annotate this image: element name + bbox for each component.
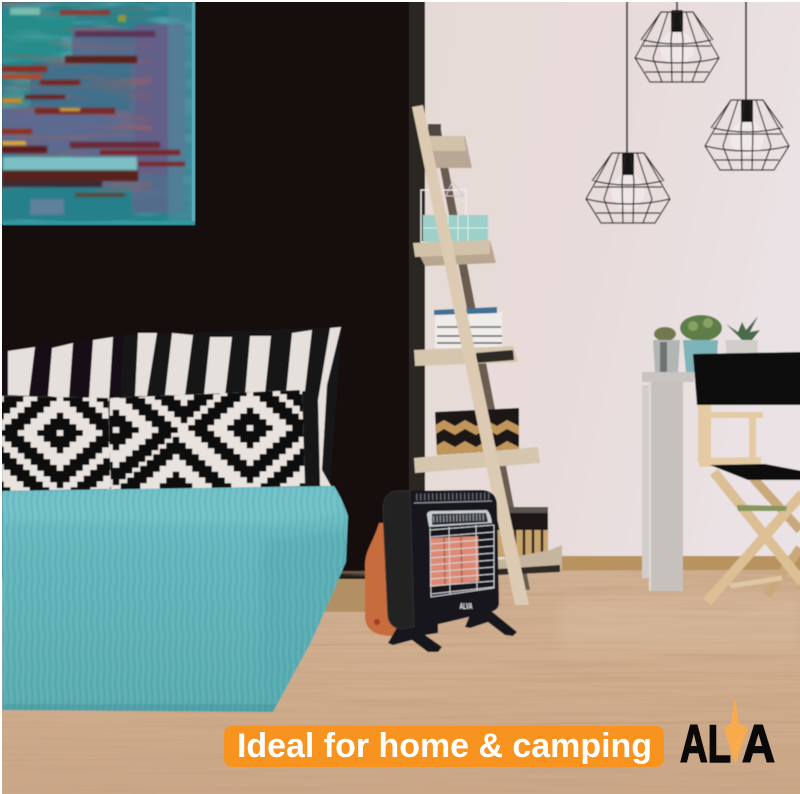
slogan text: Ideal for home & camping	[237, 727, 652, 765]
plant: cactus in silver pot	[653, 327, 680, 372]
shelf 5	[498, 545, 562, 575]
heater wire guard	[430, 525, 494, 597]
chair green bar	[737, 505, 787, 511]
stack of books	[434, 307, 502, 348]
logo letters AL: AL	[680, 715, 731, 774]
painting	[2, 2, 195, 225]
pendant lamp right	[705, 0, 789, 170]
console table	[642, 372, 694, 591]
logo letter A: A	[742, 715, 775, 774]
light wall	[410, 0, 800, 572]
striped back pillow right	[120, 327, 342, 490]
patterned front pillow left	[2, 395, 112, 492]
gas cylinder	[365, 523, 400, 636]
plant: aloe in white pot	[725, 316, 760, 356]
wooden floor	[0, 570, 800, 794]
portable gas heater	[383, 490, 517, 652]
logo flame	[724, 697, 748, 762]
heater body	[383, 490, 499, 629]
heater side panel	[383, 491, 414, 629]
pendant lamp left	[586, 0, 670, 223]
shelf back support	[433, 130, 530, 590]
plant: succulent in blue pot	[680, 315, 722, 372]
black feature wall	[0, 0, 410, 579]
director chair	[693, 352, 800, 602]
shelf leaning plank	[412, 105, 529, 605]
wire basket and teal box	[421, 182, 488, 242]
chair back canvas	[693, 352, 800, 405]
ladder shelf	[412, 105, 562, 605]
slogan banner	[224, 726, 664, 767]
zigzag storage box	[434, 408, 520, 459]
chair arm posts	[697, 405, 763, 467]
shelf 2	[413, 240, 496, 266]
pendant lamp top	[635, 0, 719, 82]
striped back pillow left	[2, 335, 132, 402]
potted plants	[653, 315, 760, 372]
chair front legs	[707, 472, 800, 602]
heater small logo: ALVA	[460, 602, 473, 611]
dark wall column	[409, 0, 425, 492]
heater top ribs	[416, 496, 490, 497]
baseboard right	[556, 556, 800, 571]
chair bottom rail	[730, 578, 782, 586]
chair rear legs	[753, 478, 800, 595]
ALVA brand logo	[680, 697, 775, 774]
teal quilted bed	[0, 484, 350, 714]
shelf 4	[414, 447, 540, 473]
striped box on floor shelf	[497, 507, 548, 557]
heater ceramic glow	[430, 536, 479, 587]
chair seat canvas	[710, 464, 800, 480]
heater logo grille	[427, 510, 492, 527]
baseboard left	[324, 578, 366, 612]
shelf 1	[428, 124, 472, 168]
patterned front pillow right	[108, 390, 306, 490]
shelf 3	[414, 346, 518, 366]
heater feet	[388, 610, 517, 652]
